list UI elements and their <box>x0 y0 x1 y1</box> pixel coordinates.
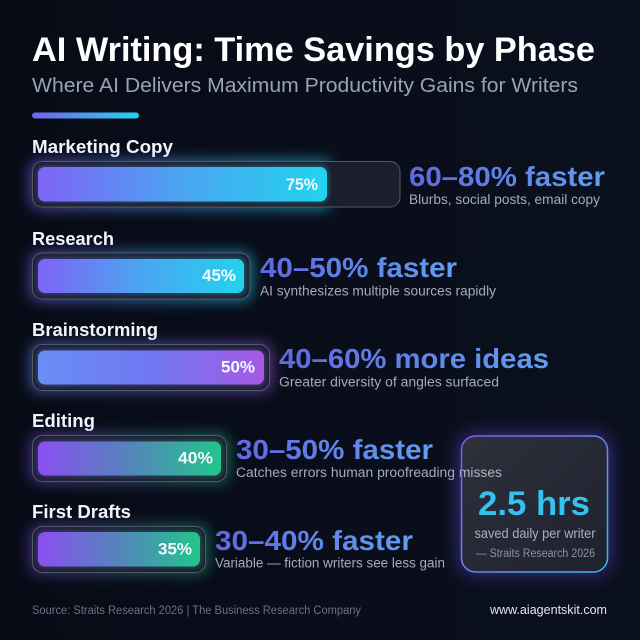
website: www.aiagentskit.com <box>489 603 607 617</box>
bar: 75% <box>30 160 400 209</box>
stat: 40–60% more ideas: 40–60% more ideas <box>279 343 549 374</box>
bar: 35%: 35% <box>158 540 192 558</box>
callout caption: saved daily per writer <box>474 526 596 541</box>
description: Variable — fiction writers see less gain <box>215 556 445 570</box>
stat: 30–50% faster: 30–50% faster <box>236 434 433 465</box>
big number: 2.5 hrs <box>478 485 590 523</box>
stat: 30–40% faster: 30–40% faster <box>215 525 413 556</box>
stat: 60–80% faster: 60–80% faster <box>409 161 605 192</box>
description: Greater diversity of angles surfaced <box>279 374 499 390</box>
label: Brainstorming: Brainstorming <box>32 319 158 340</box>
accent bar <box>32 112 139 118</box>
row: Brainstorming <box>30 319 549 392</box>
row: First Drafts <box>30 501 445 574</box>
bar: 35% <box>30 525 208 574</box>
title: AI Writing: Time Savings by Phase <box>32 31 595 69</box>
callout glass backing <box>462 436 608 572</box>
callout source: — Straits Research 2026 <box>476 548 595 560</box>
bar: 45% <box>30 252 252 301</box>
row: Marketing Copy <box>30 136 605 209</box>
description: Catches errors human proofreading misses <box>236 465 502 480</box>
description: Blurbs, social posts, email copy <box>409 192 600 207</box>
bar: 40% <box>30 434 229 483</box>
stat: 40–50% faster: 40–50% faster <box>260 252 457 283</box>
bar: 50%: 50% <box>221 358 255 376</box>
description: AI synthesizes multiple sources rapidly <box>260 284 496 298</box>
label: Marketing Copy: Marketing Copy <box>32 136 174 157</box>
bar: 75%: 75% <box>286 175 318 194</box>
callout: 2.5 hrs saved <box>462 436 608 572</box>
label: First Drafts: First Drafts <box>32 501 131 522</box>
subtitle: Where AI Delivers Maximum Productivity Gains for Writers <box>32 74 578 97</box>
callout glow <box>459 434 610 574</box>
bar: 40%: 40% <box>178 448 213 468</box>
label: Research: Research <box>32 228 114 249</box>
bar: 45%: 45% <box>202 266 236 285</box>
row: Editing <box>30 410 502 483</box>
label: Editing: Editing <box>32 410 95 431</box>
source footer: Source: Straits Research 2026 | The Business Research Company <box>32 605 361 617</box>
row: Research <box>30 228 496 301</box>
bar: 50% <box>30 343 272 392</box>
